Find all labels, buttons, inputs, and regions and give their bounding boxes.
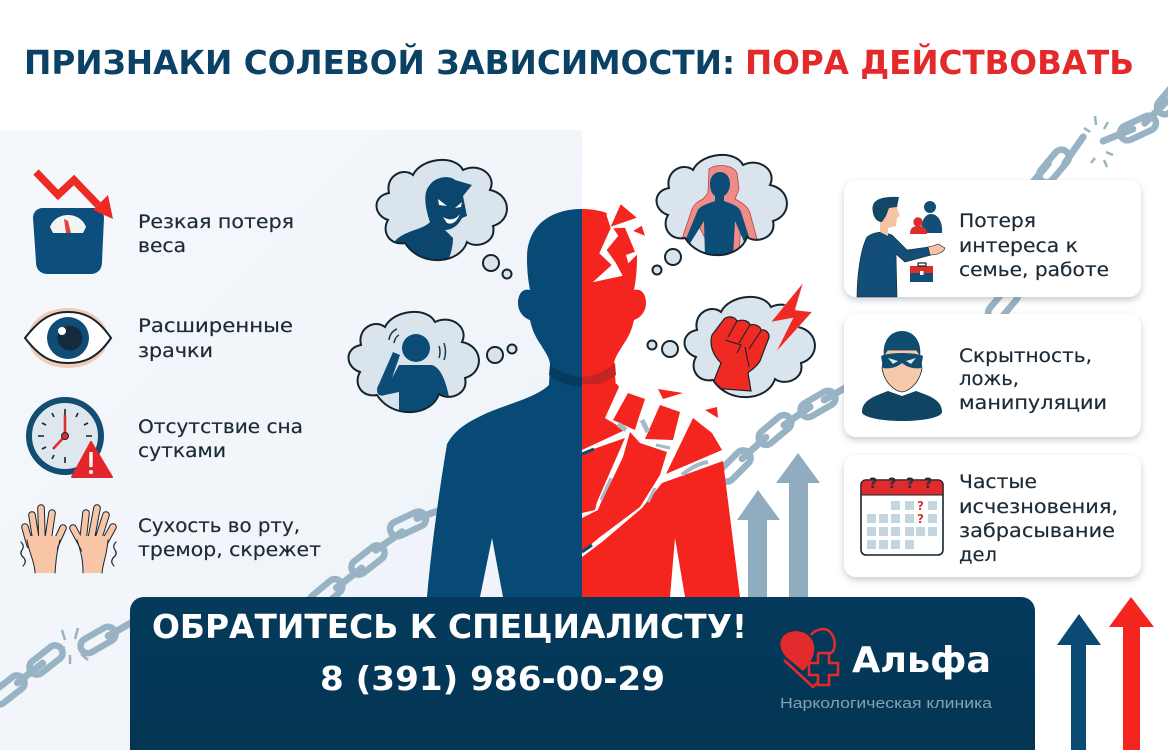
arrow: navy: [1057, 614, 1101, 750]
icon: masked man: [862, 331, 942, 421]
icon: lightning: [771, 283, 812, 352]
icon: calendar: ?: [924, 476, 932, 492]
text: dilated pupils: [138, 316, 293, 362]
icon: calendar: ?: [869, 476, 877, 492]
thought bubbles: [483, 249, 681, 363]
sign: weight loss: [33, 172, 294, 274]
chain: bottom left: [0, 508, 447, 708]
text: weight loss: [138, 212, 294, 257]
text: dilated pupils: Расширенные: [138, 316, 293, 337]
figure: blue half: [427, 209, 582, 597]
card: loss of interest: [844, 180, 1141, 297]
phone number: 8 (391) 986-00-29: [320, 659, 665, 698]
text: no sleep: [138, 417, 303, 462]
heading: contact specialist: ОБРАТИТЕСЬ К СПЕЦИАЛИСТУ!: [152, 607, 747, 646]
text: disappearances: Частые: [959, 472, 1037, 493]
text: dilated pupils: зрачки: [138, 341, 213, 362]
card: secrecy and lies: [844, 314, 1141, 437]
sign: dry mouth and tremor: [21, 508, 321, 573]
logo: subtitle: Наркологическая клиника: [780, 695, 993, 712]
figure: red head and neck: [582, 209, 646, 386]
text: weight loss: веса: [138, 236, 186, 257]
icon: man with family and briefcase: [857, 197, 945, 297]
sign: dilated pupils: [25, 308, 293, 368]
text: dry mouth and tremor: тремор, скрежет: [138, 540, 321, 561]
text: secrecy and lies: манипуляции: [959, 393, 1107, 414]
text: secrecy and lies: ложь,: [959, 369, 1019, 390]
title: [24, 44, 1134, 82]
logo: brand name: Альфа: [852, 640, 991, 681]
cloud: paranoia villain: [376, 160, 507, 264]
icon: calendar: ?: [888, 476, 896, 492]
text: dry mouth and tremor: [138, 516, 321, 561]
text: weight loss: Резкая потеря: [138, 212, 294, 233]
red torso fragments: [582, 384, 740, 597]
icon: calendar: ?: [906, 476, 914, 492]
icon: scales: [33, 208, 104, 274]
neck shadow: [549, 363, 616, 387]
cloud: hallucination silhouette: [656, 155, 787, 257]
text: loss of interest: семье, работе: [959, 260, 1109, 281]
cloud: man holding head: [348, 312, 479, 414]
text: disappearances: дел: [959, 545, 997, 566]
call-to-action bar: [130, 597, 1035, 750]
icon: calendar: [861, 476, 943, 555]
chain: right side: [716, 79, 1168, 485]
text: no sleep: Отсутствие сна: [138, 417, 303, 438]
text: secrecy and lies: [959, 346, 1107, 414]
arrow: grey short: [737, 490, 780, 597]
cloud: fist and lightning: [684, 283, 815, 397]
icon: calendar: ?: [917, 499, 924, 513]
text: loss of interest: Потеря: [959, 211, 1036, 232]
left panel background: [0, 130, 582, 750]
icon: shaking hands: [21, 508, 116, 573]
title: ПОРА ДЕЙСТВОВАТЬ: [745, 44, 1134, 82]
icon: calendar: ?: [917, 512, 924, 526]
arrow: grey tall: [776, 453, 820, 597]
icon: eye: [25, 308, 111, 368]
sign: no sleep: [29, 400, 303, 477]
text: loss of interest: [959, 211, 1109, 281]
text: loss of interest: интереса к: [959, 236, 1078, 257]
arrow: red: [1109, 597, 1154, 750]
icon: falling red arrow: [36, 172, 113, 219]
text: disappearances: забрасывание: [959, 521, 1115, 542]
text: dry mouth and tremor: Сухость во рту,: [138, 516, 300, 537]
icon: clock with warning: [29, 400, 112, 477]
logo: heart and cross: [780, 629, 838, 687]
text: disappearances: исчезновения,: [959, 497, 1118, 518]
text: disappearances: [959, 472, 1118, 566]
card: disappearances: [844, 455, 1141, 577]
text: no sleep: сутками: [138, 441, 226, 462]
chain seen through cracks: [582, 420, 708, 552]
text: secrecy and lies: Скрытность,: [959, 346, 1092, 367]
head cracks: [593, 195, 647, 282]
title: ПРИЗНАКИ СОЛЕВОЙ ЗАВИСИМОСТИ:: [24, 44, 735, 82]
central figure: [427, 195, 740, 597]
